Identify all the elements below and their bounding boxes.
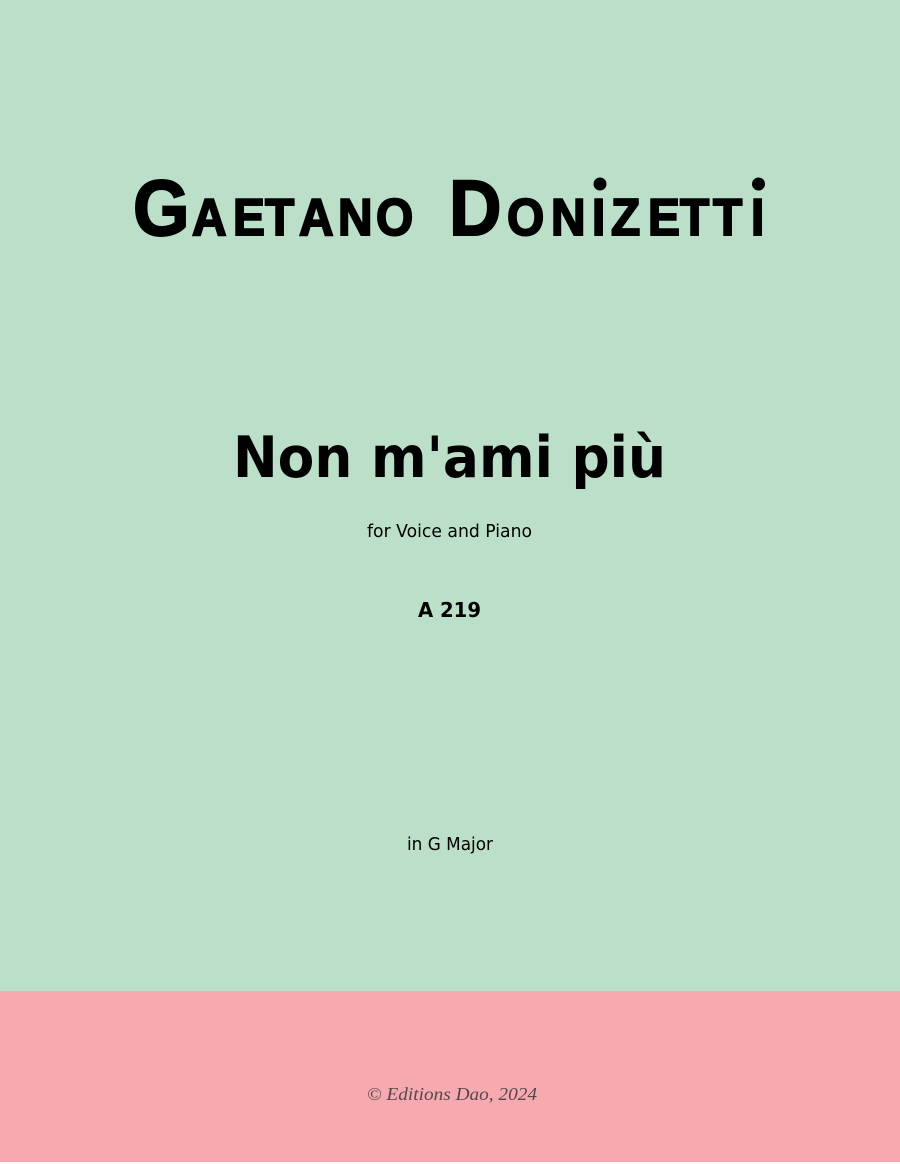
text: key: in G Major (407, 834, 494, 855)
heading: work title: Non m'ami più (233, 425, 666, 491)
text: catalogue number: A 219 (418, 598, 481, 622)
text: publisher copyright: © Editions Dao, 2024 (367, 1084, 537, 1104)
text: instrumentation: for Voice and Piano (367, 521, 532, 542)
panel: pink lower band (0, 991, 900, 1162)
heading: composer name: GAETANO DONIZETTI (133, 164, 764, 253)
